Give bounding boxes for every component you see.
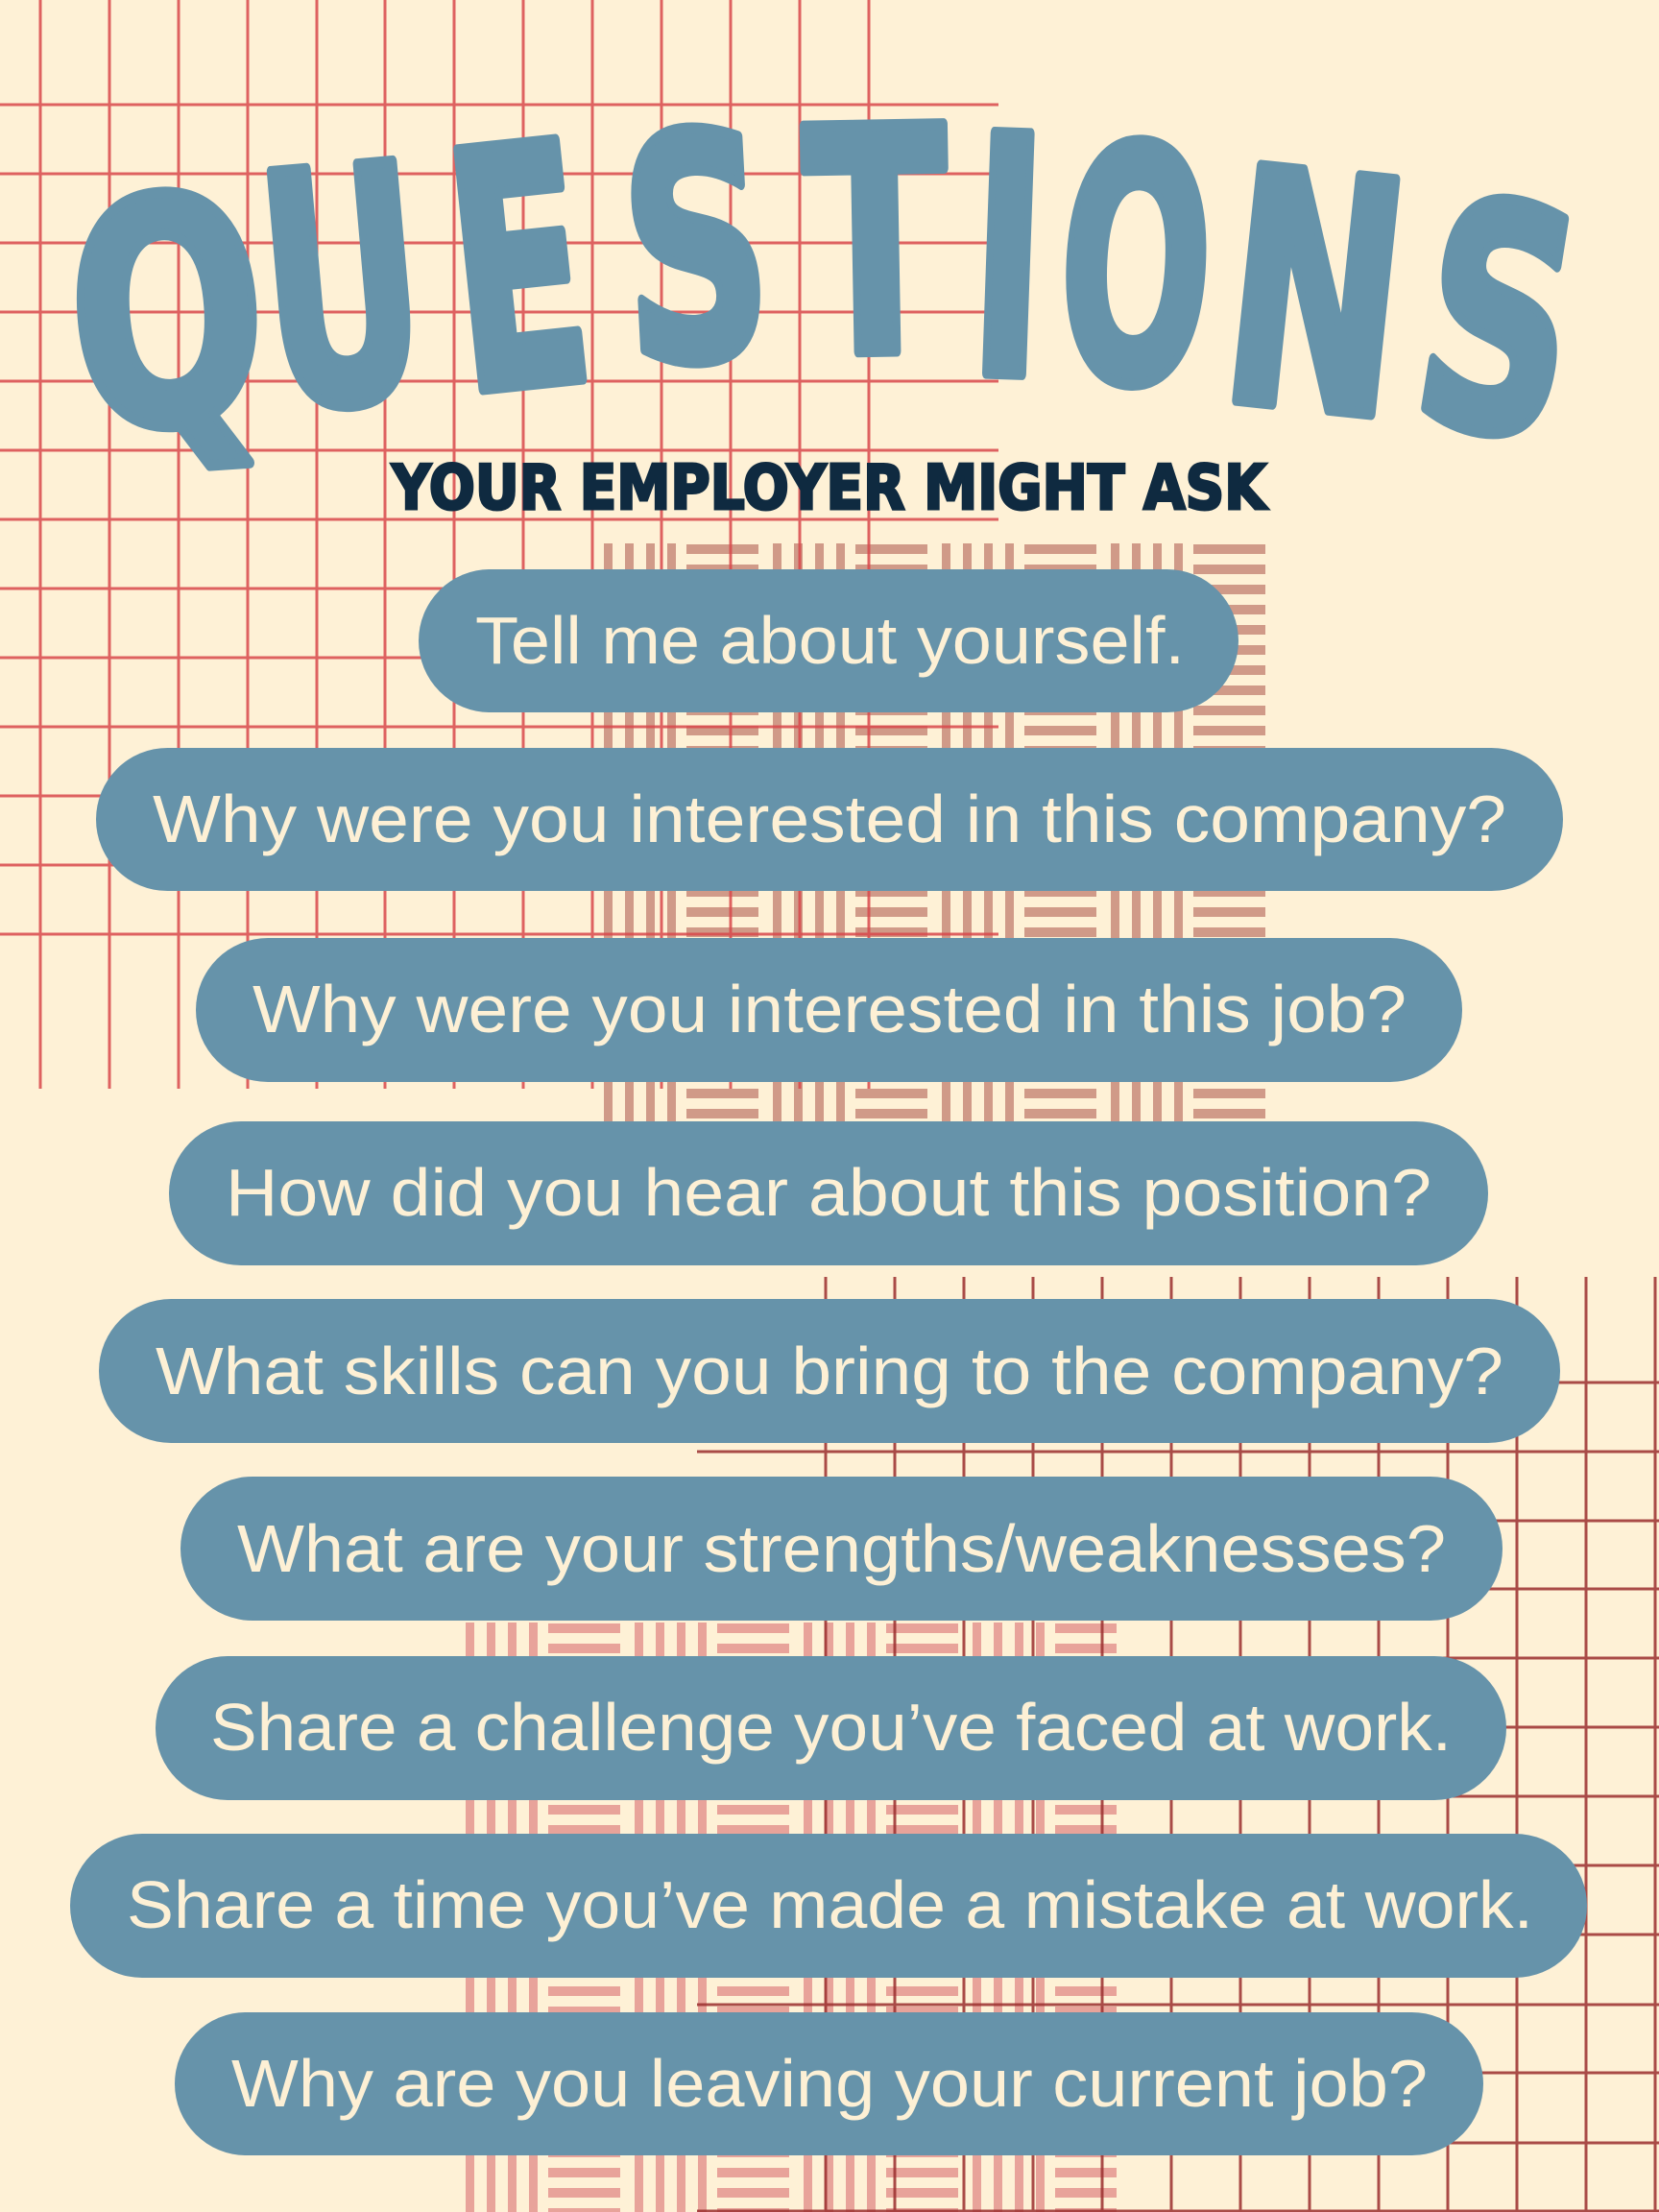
pill 8 xyxy=(70,1834,1587,1978)
weave pattern top xyxy=(592,543,1266,1121)
pill 5: What skills can you bring to the company? xyxy=(156,1334,1503,1408)
title: QUESTIONS xyxy=(58,63,1600,514)
pill 4: How did you hear about this position? xyxy=(226,1155,1431,1230)
pill 7: Share a challenge you’ve faced at work. xyxy=(210,1690,1452,1765)
weave pattern bottom xyxy=(454,1623,1117,2212)
title: QUESTIONS: E xyxy=(432,73,606,469)
title: QUESTIONS: S xyxy=(1395,132,1600,514)
title: QUESTIONS: S xyxy=(613,67,779,436)
pill 7 xyxy=(156,1656,1506,1800)
pill 8: Share a time you’ve made a mistake at work. xyxy=(127,1867,1533,1942)
pill 4 xyxy=(169,1121,1488,1265)
pill 1: Tell me about yourself. xyxy=(475,603,1185,678)
pill 6 xyxy=(180,1477,1503,1621)
pill 2 xyxy=(96,748,1563,891)
title: QUESTIONS: I xyxy=(965,67,1051,453)
title: QUESTIONS: N xyxy=(1209,100,1422,493)
title: QUESTIONS: Q xyxy=(58,129,276,502)
subtitle: YOUR EMPLOYER MIGHT ASK xyxy=(391,453,1268,524)
pill 3 xyxy=(196,938,1462,1082)
pill 9: Why are you leaving your current job? xyxy=(231,2046,1428,2121)
pill 5 xyxy=(99,1299,1560,1443)
pill 1 xyxy=(419,569,1238,712)
title: QUESTIONS: U xyxy=(247,95,439,485)
pill 2: Why were you interested in this company? xyxy=(153,781,1506,856)
pill 3: Why were you interested in this job? xyxy=(252,972,1407,1046)
title: QUESTIONS: O xyxy=(1050,78,1221,462)
pill 9 xyxy=(175,2012,1483,2155)
pill 6: What are your strengths/weaknesses? xyxy=(237,1511,1446,1586)
title: QUESTIONS: T xyxy=(802,63,951,427)
